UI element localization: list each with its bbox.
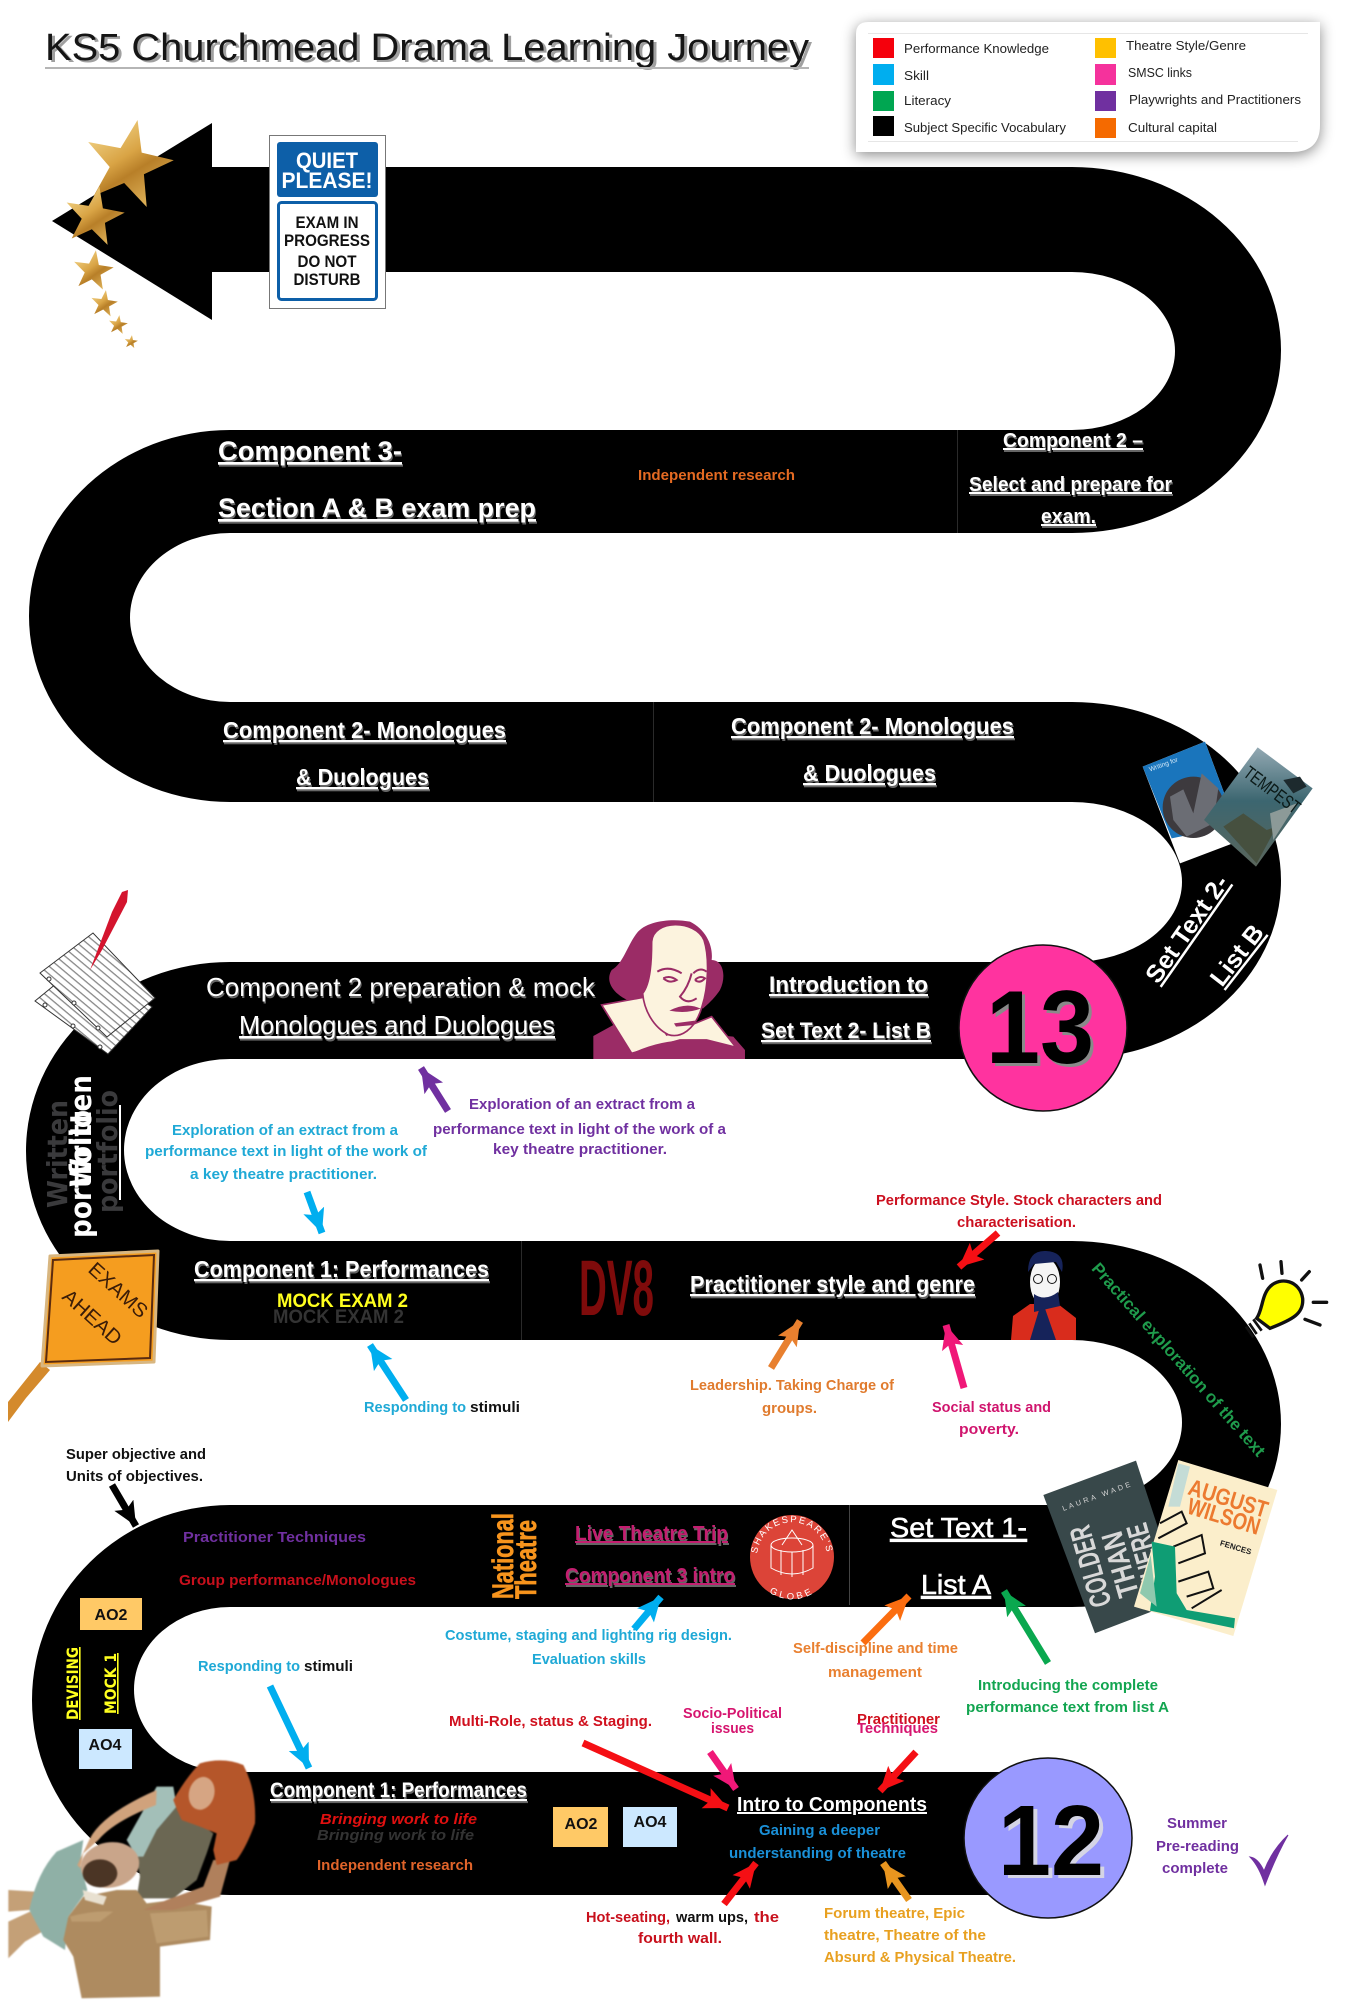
text: practitioner techniques overlap: Techniques xyxy=(857,1720,938,1737)
text: exploration blue: performance text in light of the work of xyxy=(145,1143,428,1160)
text: super objective xyxy=(66,1446,206,1485)
text: exploration blue: a key theatre practitioner. xyxy=(190,1166,377,1183)
text: leadership: groups. xyxy=(762,1400,817,1417)
heading: monologues right: & Duologues xyxy=(803,760,936,786)
text: exploration purple: key theatre practitioner. xyxy=(493,1141,667,1158)
legend panel: Theatre Style/Genre xyxy=(1126,38,1246,53)
icon: exams ahead sign: AHEAD xyxy=(58,1285,126,1350)
text: costume staging: Evaluation skills xyxy=(532,1651,646,1668)
heading: introduction to set text 2 xyxy=(761,972,931,1043)
text: forum theatre: Forum theatre, Epic xyxy=(824,1905,965,1922)
legend panel xyxy=(856,22,1320,152)
label: set text 2 list b: List B xyxy=(1205,919,1270,992)
icon: quiet please exam sign: EXAM IN xyxy=(296,213,358,232)
icon: shakespeare xyxy=(593,920,745,1059)
text: hot-seating: fourth wall. xyxy=(638,1930,722,1947)
text: exploration purple xyxy=(433,1096,727,1158)
icon: text books blue and tempest xyxy=(1143,742,1313,867)
arrow: green introducing xyxy=(1004,1591,1048,1663)
text: responding to stimuli upper: Responding to xyxy=(364,1399,466,1416)
heading: component 2 select and prepare: exam. xyxy=(1041,506,1096,528)
text: DV8 xyxy=(579,1243,654,1332)
text: hot-seating xyxy=(586,1909,779,1947)
heading: component 2 preparation: Monologues and Duologues xyxy=(239,1010,555,1040)
logo: shakespeare's globe: GLOBE xyxy=(770,1588,812,1600)
icon: books colder than there and fences xyxy=(1043,1460,1277,1636)
badge: year 13: 13 xyxy=(986,970,1094,1086)
label: written portfolio: Written xyxy=(64,1075,98,1187)
text: leadership: Leadership. Taking Charge of xyxy=(690,1377,895,1394)
text: forum theatre: Absurd & Physical Theatre. xyxy=(824,1949,1016,1966)
heading: component 3 exam prep xyxy=(218,436,536,523)
arrow: black super objective xyxy=(112,1485,136,1526)
text: socio-political: issues xyxy=(711,1720,754,1737)
legend panel: SMSC links xyxy=(1128,65,1192,80)
text: summer pre-reading complete xyxy=(1156,1815,1239,1877)
badge: AO4 road xyxy=(623,1807,677,1847)
badge: year 13 xyxy=(959,945,1127,1111)
icon: books colder than there and fences: WILSON xyxy=(1184,1493,1264,1540)
text: responding to stimuli lower xyxy=(198,1658,353,1675)
heading: intro to components xyxy=(729,1794,927,1862)
label: independent research: Independent research xyxy=(638,467,795,484)
text: super objective: Units of objectives. xyxy=(66,1468,203,1485)
legend panel: Subject Specific Vocabulary xyxy=(904,120,1066,135)
arrow: red to practitioner style xyxy=(959,1233,998,1267)
badge: AO2 road: AO2 xyxy=(565,1816,598,1833)
title: KS5 Churchmead Drama Learning Journey xyxy=(45,27,809,69)
text: responding to stimuli upper xyxy=(364,1399,520,1416)
logo: national theatre: Theatre xyxy=(510,1520,543,1599)
heading: intro to components: Intro to Components xyxy=(737,1794,927,1816)
heading: introduction to set text 2: Set Text 2- List B xyxy=(761,1018,931,1043)
label: set text 2 list b: Set Text 2- xyxy=(1140,870,1235,988)
heading: intro to components: Gaining a deeper xyxy=(759,1822,880,1839)
icon: quiet please exam sign: DO NOT xyxy=(298,252,357,271)
arrow: blue down to component 1 xyxy=(307,1192,322,1233)
heading: component 1 bringing work to life: Independent research xyxy=(317,1857,473,1874)
heading: monologues left xyxy=(223,717,506,790)
arrow: orange leadership xyxy=(771,1321,800,1368)
icon: books colder than there and fences: AUGUST xyxy=(1185,1474,1271,1523)
heading: component 1 performances mock xyxy=(194,1256,489,1328)
arrow: red multi-role xyxy=(583,1743,728,1808)
arrow: orange self discipline xyxy=(863,1596,909,1643)
heading: monologues right xyxy=(731,713,1014,786)
text: costume staging xyxy=(445,1627,732,1668)
arrows xyxy=(112,1068,1048,1904)
heading: component 1 bringing work to life xyxy=(270,1779,527,1874)
text: exploration purple: Exploration of an extract from a xyxy=(469,1096,696,1113)
badge: year 12: 12 xyxy=(998,1785,1104,1897)
text: exploration blue: Exploration of an extract from a xyxy=(172,1122,399,1139)
badge: AO2 left xyxy=(80,1598,142,1630)
badge: AO4 road: AO4 xyxy=(634,1814,667,1831)
arrow: amber forum theatre xyxy=(883,1863,909,1900)
icon: books colder than there and fences: COLDER xyxy=(1064,1521,1119,1611)
heading: set text 1 list a: List A xyxy=(921,1569,991,1600)
icon: text books blue and tempest: Writing for xyxy=(1148,756,1180,774)
icon: performers photo xyxy=(8,1760,255,1998)
text: self discipline xyxy=(793,1640,958,1681)
icon: light bulb xyxy=(1246,1262,1327,1337)
arrow: blue costume xyxy=(634,1597,661,1629)
text: summer pre-reading complete: Pre-reading xyxy=(1156,1838,1239,1855)
text: forum theatre xyxy=(824,1905,1016,1966)
text: practitioner techniques overlap: Practitioner xyxy=(857,1711,940,1728)
icon: books colder than there and fences: FENCES xyxy=(1219,1539,1253,1557)
text: hot-seating: warm ups, xyxy=(675,1909,748,1926)
badge: AO4 left: AO4 xyxy=(89,1737,122,1754)
heading: component 2 select and prepare: Component 2 – xyxy=(1003,430,1143,452)
heading: component 2 preparation: Component 2 preparation & mock xyxy=(206,972,596,1002)
heading: component 1 bringing work to life: Bringing work to life xyxy=(320,1811,477,1828)
icon: books colder than there and fences: THERE xyxy=(1121,1519,1171,1593)
heading: component 1 bringing work to life: Component 1: Performances xyxy=(270,1779,527,1802)
text: socio-political xyxy=(683,1705,782,1737)
heading: introduction to set text 2: Introduction to xyxy=(769,972,928,997)
heading: component 2 select and prepare xyxy=(969,430,1172,528)
text: exploration blue xyxy=(145,1122,428,1183)
heading: component 3 exam prep: Section A & B exam prep xyxy=(218,493,536,523)
label: written portfolio: portfolio xyxy=(91,1090,124,1213)
icon: exams ahead sign: EXAMS xyxy=(84,1258,152,1323)
text: leadership xyxy=(690,1377,895,1417)
arrow: blue up from stimuli xyxy=(370,1345,406,1400)
badge: AO2 left: AO2 xyxy=(95,1607,128,1624)
heading: monologues left: & Duologues xyxy=(296,764,429,790)
text: super objective: Super objective and xyxy=(66,1446,206,1463)
heading: live theatre trip: Live Theatre Trip xyxy=(575,1523,728,1545)
icon: quiet please exam sign: PLEASE! xyxy=(282,168,372,193)
heading: monologues left: Component 2- Monologues xyxy=(223,717,506,743)
arrow: blue long stimuli xyxy=(270,1686,309,1768)
legend panel: Skill xyxy=(904,68,929,83)
text: socio-political: Socio-Political xyxy=(683,1705,782,1722)
heading: component 2 preparation xyxy=(206,972,596,1040)
badge: AO4 left xyxy=(79,1729,132,1769)
heading: component 1 performances mock: Component 1: Performances xyxy=(194,1256,489,1282)
text: responding to stimuli upper: stimuli xyxy=(470,1399,520,1416)
legend panel: Cultural capital xyxy=(1128,120,1217,135)
logo: national theatre: National xyxy=(487,1513,520,1599)
icon: paper and pen xyxy=(35,890,155,1054)
badge: AO2 road xyxy=(553,1807,608,1847)
heading: intro to components: understanding of theatre xyxy=(729,1845,906,1862)
title: KS5 Churchmead Drama Learning Journey xyxy=(48,29,812,71)
logo: national theatre xyxy=(487,1513,543,1599)
heading: component 2 select and prepare: Select and prepare for xyxy=(969,474,1172,496)
text: self discipline: Self-discipline and time xyxy=(793,1640,958,1657)
text: introducing the complete: Introducing the complete xyxy=(978,1677,1158,1694)
text: hot-seating: Hot-seating, xyxy=(586,1909,670,1926)
heading: set text 1 list a xyxy=(890,1512,1027,1600)
icon: gold stars xyxy=(61,111,180,349)
badge: year 12 xyxy=(964,1758,1132,1918)
heading: component 1 performances mock: MOCK EXAM 2 xyxy=(277,1291,408,1312)
text: introducing the complete: performance text from list A xyxy=(966,1699,1169,1716)
icon: text books blue and tempest: TEMPEST xyxy=(1240,762,1305,818)
icon: exams ahead sign xyxy=(8,1251,158,1422)
legend panel: Playwrights and Practitioners xyxy=(1129,92,1302,107)
text: exploration purple: performance text in light of the work of a xyxy=(433,1121,727,1138)
text: hot-seating: the xyxy=(754,1909,779,1926)
legend panel: Performance Knowledge xyxy=(904,41,1049,56)
text: social status xyxy=(932,1399,1051,1438)
text: costume staging: Costume, staging and lighting rig design. xyxy=(445,1627,732,1644)
text: introducing the complete xyxy=(966,1677,1169,1716)
arrow: red practitioner techniques xyxy=(880,1752,916,1791)
text: responding to stimuli lower: Responding to xyxy=(198,1658,300,1675)
arrow: purple to monologues xyxy=(421,1068,448,1111)
label: practitioner techniques: Practitioner Techniques xyxy=(183,1529,366,1546)
text: social status: poverty. xyxy=(959,1421,1019,1438)
heading: component 1 bringing work to life: Bringing work to life xyxy=(317,1827,474,1844)
icon: purple tick xyxy=(1250,1835,1288,1885)
heading: component 3 exam prep: Component 3- xyxy=(218,436,402,466)
text: forum theatre: theatre, Theatre of the xyxy=(824,1927,986,1944)
icon: brecht portrait xyxy=(1011,1251,1076,1340)
badge: year 13: 13 xyxy=(989,973,1097,1089)
text: social status: Social status and xyxy=(932,1399,1051,1416)
text: responding to stimuli lower: stimuli xyxy=(304,1658,353,1675)
heading: set text 1 list a: Set Text 1- xyxy=(890,1512,1027,1543)
heading: monologues right: Component 2- Monologues xyxy=(731,713,1014,739)
text: summer pre-reading complete: Summer xyxy=(1167,1815,1227,1832)
text: self discipline: management xyxy=(828,1664,922,1681)
label: written portfolio xyxy=(41,1075,124,1238)
text: performance style xyxy=(876,1192,1162,1231)
arrow: red hot-seating xyxy=(724,1863,756,1904)
label: devising mock 1: DEVISING xyxy=(63,1647,82,1720)
label: practical exploration: Practical exploration of the text xyxy=(1088,1259,1269,1461)
label: devising mock 1: MOCK 1 xyxy=(101,1653,120,1714)
text: performance style: Performance Style. Stock characters and xyxy=(876,1192,1162,1209)
label: devising mock 1 xyxy=(63,1647,120,1720)
legend panel: Literacy xyxy=(904,93,952,108)
heading: live theatre trip: Component 3 intro xyxy=(565,1565,735,1587)
arrow: pink social status xyxy=(946,1325,964,1388)
icon: books colder than there and fences: LAURA WADE xyxy=(1061,1479,1134,1513)
text: practitioner techniques overlap xyxy=(857,1711,940,1737)
heading: practitioner style and genre: Practitioner style and genre xyxy=(690,1271,975,1297)
text: summer pre-reading complete: complete xyxy=(1162,1860,1228,1877)
icon: quiet please exam sign: PROGRESS xyxy=(284,231,370,250)
icon: books colder than there and fences: THAN xyxy=(1096,1528,1146,1601)
badge: year 12: 12 xyxy=(1002,1788,1108,1900)
text: multi-role: Multi-Role, status & Staging. xyxy=(449,1713,652,1730)
logo: shakespeare's globe: SHAKESPEARE'S xyxy=(751,1516,833,1553)
heading: component 1 performances mock: MOCK EXAM 2 xyxy=(273,1307,404,1328)
label: written portfolio: portfolio xyxy=(64,1110,98,1238)
heading: live theatre trip xyxy=(565,1523,735,1587)
text: performance style: characterisation. xyxy=(957,1214,1076,1231)
label: written portfolio: Written xyxy=(41,1100,74,1208)
icon: quiet please exam sign: QUIET xyxy=(296,148,359,173)
logo: shakespeare's globe xyxy=(750,1515,834,1600)
icon: quiet please exam sign: DISTURB xyxy=(294,270,360,289)
arrow: pink socio-political xyxy=(710,1752,736,1789)
label: group performance: Group performance/Monologues xyxy=(179,1572,416,1589)
icon: quiet please exam sign xyxy=(270,136,386,308)
